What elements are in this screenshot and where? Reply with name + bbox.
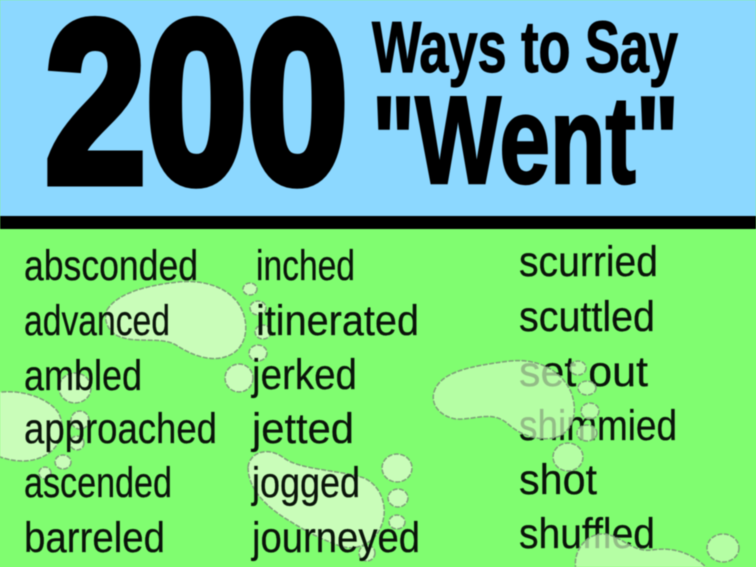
word column 1 bbox=[24, 242, 217, 562]
green background bbox=[0, 229, 756, 567]
footprint: left edge bbox=[0, 373, 91, 479]
word column 2: journeyed bbox=[250, 514, 420, 562]
word column 1: barreled bbox=[24, 514, 165, 562]
word column 2: itinerated bbox=[256, 297, 419, 345]
word column 2 bbox=[250, 242, 420, 562]
word column 3: set out bbox=[519, 348, 648, 396]
word column 1: approached bbox=[24, 405, 217, 453]
footprint: lower centre bbox=[248, 452, 412, 561]
footprint: upper left bbox=[106, 282, 271, 392]
word column 3 bbox=[519, 238, 677, 558]
footprint: bottom right bbox=[575, 534, 739, 567]
title bbox=[45, 0, 679, 230]
word column 1: ascended bbox=[24, 459, 172, 507]
word column 1: advanced bbox=[24, 297, 170, 345]
word column 3: shot bbox=[519, 456, 597, 504]
word column 1: ambled bbox=[24, 352, 142, 400]
word column 3: shimmied bbox=[519, 402, 677, 450]
word column 2: jogged bbox=[250, 459, 360, 507]
word column 3: scurried bbox=[519, 238, 658, 286]
word column 1: absconded bbox=[24, 242, 198, 290]
word column 2: inched bbox=[256, 242, 355, 290]
word column 2: jerked bbox=[250, 351, 357, 399]
footprint: right centre bbox=[433, 361, 599, 471]
divider bar bbox=[0, 216, 756, 229]
header background bbox=[0, 0, 756, 217]
word column 2: jetted bbox=[250, 405, 354, 453]
word column 3: scuttled bbox=[519, 293, 655, 341]
word column 3: shuffled bbox=[519, 510, 655, 558]
